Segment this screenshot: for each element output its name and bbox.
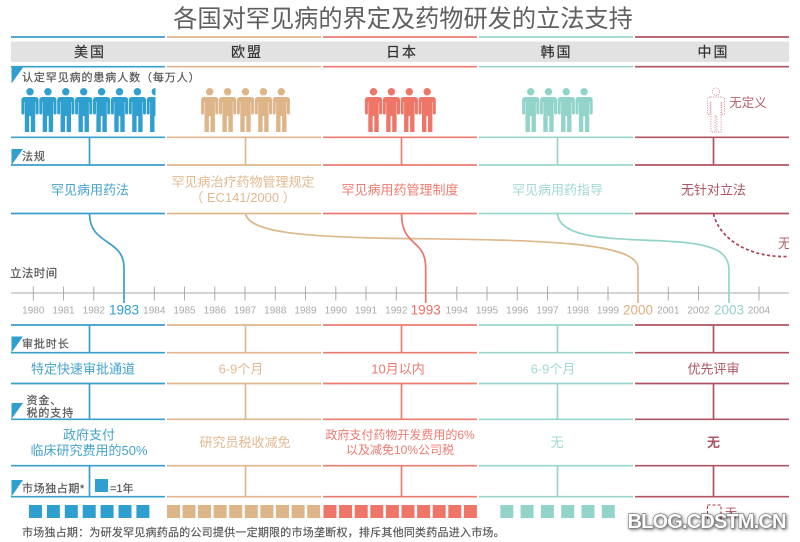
Japan exclusivity squares bbox=[324, 505, 477, 518]
year labels: 2002 bbox=[687, 306, 710, 316]
year labels: 1988 bbox=[264, 306, 287, 316]
panel: South Korea column bbox=[479, 37, 633, 518]
footnote: 市场独占期：为研发罕见病药品的公司提供一定期限的市场垄断权，排斥其他同类药品进入市场。 bbox=[22, 525, 505, 539]
China approval: 优先评审 bbox=[687, 362, 740, 376]
China funding: 无 bbox=[707, 435, 720, 450]
section marker: legislation: 法规 bbox=[22, 149, 46, 163]
legend: one square equals one year: =1年 bbox=[110, 481, 134, 495]
connector: US to 1983: 1983 bbox=[109, 302, 139, 318]
year labels: 1989 bbox=[294, 306, 317, 316]
panel: European Union column bbox=[167, 37, 321, 518]
US approval: 特定快速审批通道 bbox=[31, 362, 135, 376]
Korea exclusivity squares bbox=[500, 505, 615, 518]
US people icons bbox=[21, 88, 164, 132]
year labels: 1981 bbox=[52, 306, 75, 316]
year labels: 1997 bbox=[536, 306, 559, 316]
US funding: 政府支付 bbox=[63, 428, 115, 442]
section marker: patient count bbox=[12, 68, 200, 84]
connector: Japan to 1993 bbox=[402, 214, 441, 318]
Japan approval: 10月以内 bbox=[371, 362, 425, 376]
Korea grid lines bbox=[479, 37, 633, 497]
connector: China dashed no legislation: 无 bbox=[778, 236, 791, 251]
Japan funding detail: 以及减免10%公司税 bbox=[346, 442, 454, 457]
year labels: 1986 bbox=[204, 306, 226, 316]
year labels: 1990 bbox=[325, 306, 347, 316]
Korea funding: 无 bbox=[550, 435, 564, 450]
year labels: 1996 bbox=[506, 306, 529, 316]
year labels: 1992 bbox=[385, 306, 408, 316]
year labels: 1982 bbox=[83, 306, 105, 316]
China dotted person icon bbox=[707, 88, 725, 132]
panel: China column bbox=[635, 37, 789, 520]
EU approval: 6-9个月 bbox=[219, 362, 263, 376]
connector: China dashed no legislation bbox=[714, 214, 791, 257]
Korea approval: 6-9个月 bbox=[531, 362, 575, 376]
China undefined label: 无定义 bbox=[729, 95, 767, 110]
US law: 罕见病用药法 bbox=[51, 182, 129, 198]
Korea heading: 韩国 bbox=[540, 44, 572, 60]
year labels: 1984 bbox=[143, 306, 166, 316]
connector: Japan to 1993: 1993 bbox=[411, 302, 441, 318]
US heading: 美国 bbox=[74, 44, 106, 60]
section marker: market exclusivity bbox=[12, 480, 85, 496]
connector: Korea to 2003 bbox=[558, 214, 744, 318]
connector: Korea to 2003: 2003 bbox=[714, 302, 744, 318]
year labels: 1998 bbox=[567, 306, 589, 316]
section marker: market exclusivity: 市场独占期* bbox=[22, 481, 85, 495]
section marker: funding and tax support bbox=[12, 393, 74, 420]
Japan heading: 日本 bbox=[386, 44, 418, 60]
section marker: legislation bbox=[12, 149, 46, 165]
US exclusivity squares bbox=[29, 505, 149, 518]
section marker: patient count: 认定罕见病的患病人数（每万人） bbox=[22, 70, 200, 84]
section marker: approval time: 审批时长 bbox=[22, 336, 70, 350]
year labels: 1987 bbox=[234, 306, 257, 316]
US funding detail: 临床研究费用的50% bbox=[30, 443, 148, 458]
EU law code: （ EC141/2000 ） bbox=[190, 190, 296, 205]
year labels: 2004 bbox=[748, 306, 771, 316]
China exclusivity none marker bbox=[708, 505, 721, 518]
Japan law: 罕见病用药管理制度 bbox=[341, 182, 459, 198]
China exclusivity none label: 无 bbox=[725, 506, 737, 520]
panel: Japan column bbox=[323, 37, 477, 518]
section marker: funding and tax support: 资金、 bbox=[26, 393, 62, 407]
Korea people icons bbox=[522, 88, 593, 132]
EU people icons bbox=[201, 88, 290, 132]
Japan funding: 政府支付药物开发费用的6% bbox=[325, 427, 475, 442]
year labels bbox=[22, 306, 771, 316]
Japan people icons bbox=[365, 88, 436, 132]
US grid lines bbox=[11, 37, 165, 497]
EU funding: 研究员税收减免 bbox=[199, 435, 291, 450]
Japan grid lines bbox=[323, 37, 477, 497]
year labels: 1995 bbox=[476, 306, 499, 316]
year labels: 2001 bbox=[657, 306, 680, 316]
EU heading: 欧盟 bbox=[231, 44, 263, 60]
China heading: 中国 bbox=[698, 44, 730, 60]
section marker: approval time bbox=[12, 336, 70, 352]
China grid lines bbox=[635, 37, 789, 497]
connector: US to 1983 bbox=[90, 214, 139, 318]
connector: EU to 2000 bbox=[246, 214, 653, 318]
header band bbox=[11, 42, 789, 62]
EU law: 罕见病治疗药物管理规定 bbox=[171, 174, 315, 190]
watermark: BLOG.CDSTM.CN bbox=[628, 511, 786, 533]
year labels: 1991 bbox=[355, 306, 378, 316]
legend: one square equals one year bbox=[95, 479, 134, 495]
connector: EU to 2000: 2000 bbox=[623, 302, 653, 318]
year labels: 1999 bbox=[597, 306, 620, 316]
year labels: 1994 bbox=[446, 306, 468, 316]
year labels: 1985 bbox=[173, 306, 196, 316]
panel: United States column bbox=[11, 37, 165, 518]
title: 各国对罕见病的界定及药物研发的立法支持 bbox=[173, 6, 633, 33]
timeline label: 立法时间 bbox=[10, 266, 58, 280]
China law: 无针对立法 bbox=[681, 182, 746, 198]
section marker: funding and tax support: 税的支持 bbox=[26, 406, 74, 420]
timeline axis bbox=[11, 286, 789, 316]
year labels: 1980 bbox=[22, 306, 45, 316]
Korea law: 罕见病用药指导 bbox=[512, 182, 603, 198]
EU grid lines bbox=[167, 37, 321, 497]
EU exclusivity squares bbox=[167, 505, 320, 518]
